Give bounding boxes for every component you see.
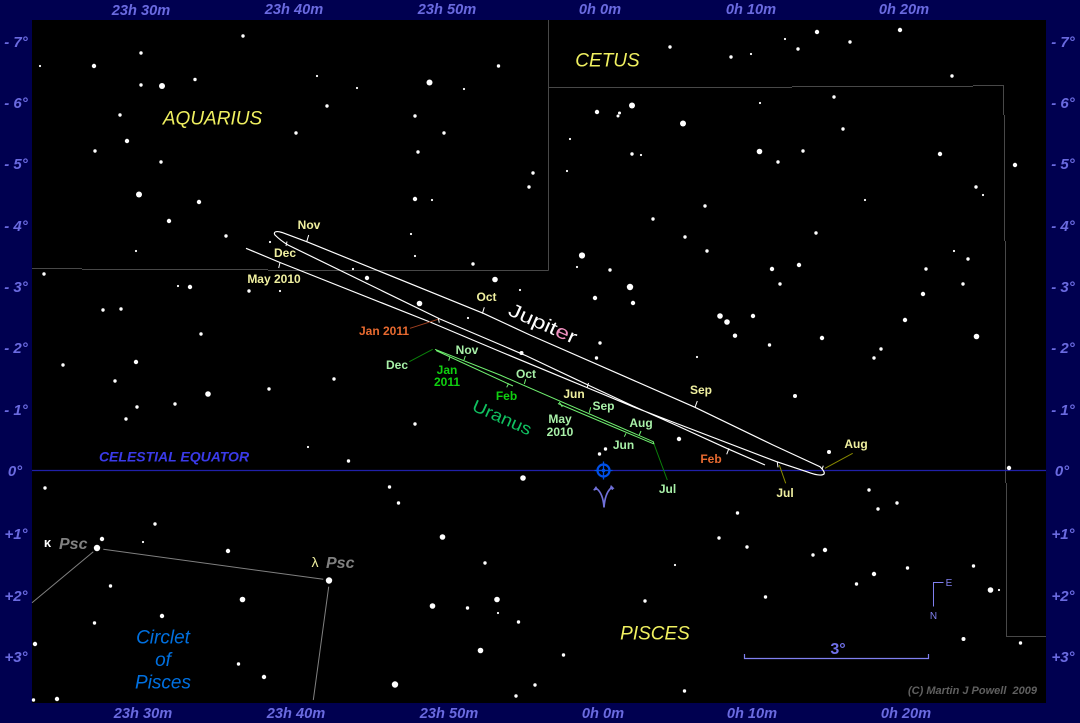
- axis: bottom right ascension labels: 0h 10m: [727, 706, 777, 722]
- axis: left declination labels: +2°: [4, 588, 29, 605]
- star label: kappa Psc: Psc: [59, 536, 88, 553]
- planet name: Jupiter: Jupiter: [505, 300, 581, 349]
- Uranus bright green date labels: [434, 363, 517, 403]
- Jupiter orange date labels: [359, 324, 722, 466]
- Jupiter date ticks: [279, 235, 823, 469]
- Uranus bright green date labels: 2011: [434, 375, 460, 389]
- Jupiter date labels: Nov: [298, 218, 321, 232]
- axis: right declination labels: +2°: [1051, 588, 1076, 605]
- Jupiter orange date labels: Feb: [700, 452, 722, 466]
- axis: left declination labels: +1°: [4, 526, 29, 543]
- axis: right declination labels: - 4°: [1051, 218, 1076, 235]
- Uranus bright green date labels: Feb: [496, 389, 517, 403]
- axis: left declination labels: - 2°: [4, 340, 29, 357]
- compass: north and east: E: [946, 578, 953, 589]
- constellation name: Cetus: CETUS: [575, 50, 640, 72]
- axis: bottom right ascension labels: 23h 40m: [266, 706, 325, 722]
- path: Jupiter track: [246, 232, 824, 475]
- axis: left declination labels: +3°: [4, 649, 29, 666]
- axis: bottom right ascension labels: 0h 20m: [881, 706, 931, 722]
- Uranus date labels: Dec: [386, 358, 408, 372]
- star label: kappa Psc: κ: [44, 535, 52, 550]
- credit: (C) Martin J Powell 2009: [908, 685, 1038, 697]
- Uranus bright green date labels: Jan: [437, 363, 457, 377]
- star label: lambda Psc: Psc: [326, 555, 355, 572]
- axis: left declination labels: - 6°: [4, 95, 29, 112]
- axis: left declination labels: - 7°: [4, 34, 29, 51]
- asterism name: Circlet of Pisces: Pisces: [135, 672, 191, 694]
- axis: top right ascension labels: 23h 50m: [417, 2, 476, 18]
- asterism name: Circlet of Pisces: Circlet: [136, 628, 191, 648]
- equator label: CELESTIAL EQUATOR: [99, 448, 250, 464]
- axis: top right ascension labels: 0h 0m: [579, 2, 621, 18]
- Jupiter date labels: Oct: [476, 290, 497, 304]
- axis: bottom right ascension labels: 0h 0m: [582, 706, 624, 722]
- axis: top right ascension labels: 23h 30m: [111, 3, 170, 19]
- axis: top right ascension labels: 0h 20m: [879, 2, 929, 18]
- Jupiter date labels: [247, 218, 868, 500]
- Uranus date labels: 2010: [547, 425, 574, 439]
- icon: Aries symbol: [594, 486, 614, 508]
- constellation name: Pisces: PISCES: [620, 624, 690, 644]
- asterism name: Circlet of Pisces: of: [155, 650, 173, 671]
- axis: right declination labels: 0°: [1055, 463, 1070, 480]
- star label: lambda Psc: [312, 554, 355, 572]
- axis: right declination labels: [1051, 34, 1076, 666]
- axis: left declination labels: 0°: [8, 463, 23, 480]
- axis: left declination labels: - 5°: [4, 156, 29, 173]
- Uranus date labels: [386, 343, 676, 496]
- Uranus date ticks: [449, 356, 641, 437]
- celestial equator line: [32, 470, 1046, 472]
- axis: right declination labels: +1°: [1051, 526, 1076, 543]
- axis: bottom right ascension labels: [113, 706, 931, 722]
- axis: top right ascension labels: 0h 10m: [726, 2, 776, 18]
- axis: right declination labels: - 2°: [1051, 340, 1076, 357]
- Uranus date labels: Oct: [516, 367, 536, 381]
- constellation figure lines: [32, 549, 329, 700]
- Jupiter date labels: Sep: [690, 383, 712, 397]
- star label: kappa Psc: [44, 535, 88, 553]
- Uranus date labels: Jun: [613, 438, 634, 452]
- asterism name: Circlet of Pisces: [135, 628, 191, 694]
- axis: left declination labels: [4, 34, 29, 666]
- scale bar: 3 degrees: 3°: [830, 641, 846, 658]
- planet name: Uranus: Uranus: [469, 396, 535, 439]
- star label: lambda Psc: λ: [312, 554, 318, 570]
- axis: right declination labels: - 1°: [1051, 402, 1076, 419]
- constellation name: Aquarius: AQUARIUS: [162, 108, 262, 130]
- Uranus date labels: May: [548, 412, 572, 426]
- scale bar: 3 degrees: [744, 641, 928, 658]
- compass: north and east: [930, 578, 953, 622]
- Jupiter date labels: Dec: [274, 246, 296, 260]
- icon: vernal equinox marker: [594, 462, 612, 480]
- Jupiter orange date labels: Jan 2011: [359, 324, 409, 338]
- Jupiter date labels: Jun: [563, 387, 585, 401]
- compass: north and east: N: [930, 611, 937, 622]
- axis: left declination labels: - 3°: [4, 279, 29, 296]
- Jupiter date labels: Jul: [776, 486, 794, 500]
- Uranus path: [435, 349, 654, 444]
- Uranus date labels: Nov: [456, 343, 479, 357]
- axis: right declination labels: - 6°: [1051, 95, 1076, 112]
- leader lines: [409, 319, 853, 483]
- Uranus date labels: Jul: [659, 482, 676, 496]
- Uranus date labels: Aug: [629, 416, 653, 430]
- axis: bottom right ascension labels: 23h 50m: [419, 706, 478, 722]
- axis: right declination labels: - 7°: [1051, 34, 1076, 51]
- axis: bottom right ascension labels: 23h 30m: [113, 706, 172, 722]
- axis: top right ascension labels: 23h 40m: [264, 2, 323, 18]
- Jupiter date labels: May 2010: [247, 272, 301, 286]
- axis: top right ascension labels: [111, 2, 929, 19]
- Jupiter path: [246, 232, 824, 475]
- axis: right declination labels: - 3°: [1051, 279, 1076, 296]
- axis: right declination labels: - 5°: [1051, 156, 1076, 173]
- Uranus date labels: Sep: [592, 399, 615, 413]
- axis: left declination labels: - 4°: [4, 218, 29, 235]
- axis: right declination labels: +3°: [1051, 649, 1076, 666]
- axis: left declination labels: - 1°: [4, 402, 29, 419]
- Jupiter date labels: Aug: [844, 437, 868, 451]
